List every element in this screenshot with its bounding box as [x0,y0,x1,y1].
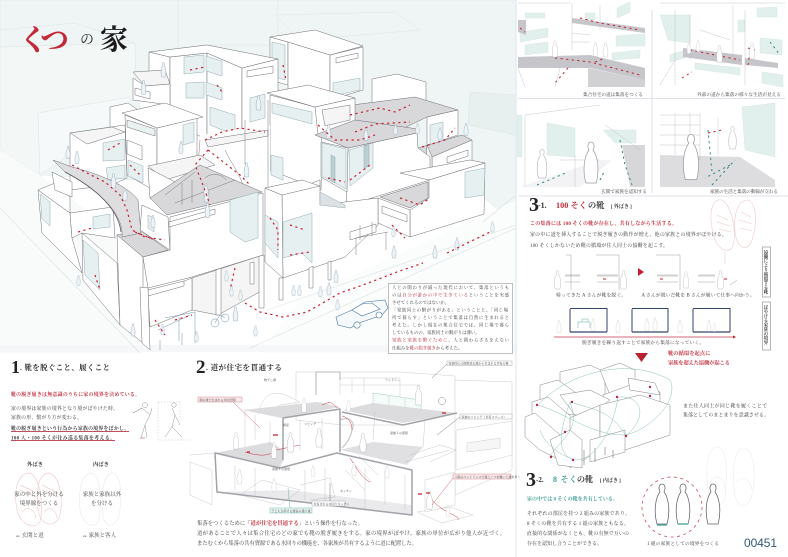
family circle with figures [642,477,720,547]
caption 3: 玄関で家族を認知する [601,188,647,195]
heading 3-2 [526,469,621,491]
axonometric community model [525,363,672,468]
caption 1: 集合住宅の道は集落をつくる [583,91,643,98]
inner slippers [80,460,122,525]
pale slippers [707,447,754,506]
callouts: 家族のリビング（共有スペース） [462,414,506,419]
section 3-2 [526,447,777,550]
curved bridge [53,160,141,237]
perspective 3 [517,105,645,187]
large shoe illustration [711,200,755,264]
section 2 text [197,519,505,547]
heading 3-1: [ 外ばき ] [611,203,632,210]
heading 3-1: 3 [529,194,539,216]
road lines [0,195,516,353]
perspective 2 [660,3,785,87]
text box: concept: 人との関わりが減った現代において、集落というも [392,284,509,291]
heading 3-2: -2. [536,476,544,484]
inner slippers: を分ける [91,499,113,507]
text box: concept: しているものの、家族同士の繋がりは薄い。 [392,329,480,336]
model description: 集落としてのまとまりを意識させる。 [683,412,769,418]
inner slippers: 内ばき [93,460,109,468]
room labels: 寝室 [283,422,289,427]
title: くつ [19,25,69,57]
outer shoes: 家の中と外を分ける [14,490,64,498]
family to community diagram: 脱ぎ履きを繰り返すことで家族から集落になっていく。 [582,339,704,346]
room labels: 物干し場 [264,377,276,382]
heading 1: . 靴を脱ぐこと、履くこと [20,363,110,372]
decks [243,402,340,418]
tower A [133,45,278,160]
heading 2: 2 [196,357,206,378]
block P with terrace Q [315,120,430,206]
large grey terrace [148,155,262,215]
room labels: 家族２の部屋 [390,430,408,435]
room labels: キッチン [340,488,352,493]
heading 3-2: 3 [526,469,536,491]
perspective images [517,2,788,196]
heading 3-1: の靴 [588,200,605,210]
text 3-2 [527,496,630,547]
text box: concept: 「家族同士の繋がりがある」ということと、「同じ場 [392,306,509,314]
center fill [198,100,270,192]
heading 2 [196,357,282,378]
text box: concept: させてくれるのではないか。 [392,299,449,306]
text box: concept: 所で暮らす」ということで集落は自然に生まれると [392,314,509,321]
examples: ex. 玄関と道 [16,531,44,539]
text box: concept: 仕組みを靴の脱ぎ履きから考えた。 [392,344,462,352]
vertical label: cooperation: 協働により循環する靴 [763,249,769,295]
red arrow and statement [635,349,730,366]
section 1 text: 100 人・100 そくが住み巡る集落を考える。 [11,434,115,442]
shoe exchange diagram: 帰ってきた A さんが靴を脱ぐ。 [556,292,626,298]
vertical label: cooperation [762,247,770,297]
table and bicycle at front [158,222,388,350]
perspective 1 [518,2,645,87]
inner slippers: 家族と家族以外 [83,490,122,498]
front block U [38,172,263,350]
section 2 [190,357,520,547]
people on building [66,63,494,342]
text box: concept: 考えた。しかし現在の集合住宅では、同じ場で暮ら [392,322,509,328]
car [336,300,388,328]
model description [683,402,769,418]
vertical column divider [515,0,517,557]
section drawing [190,361,520,523]
background: surrounding pale context buildings [0,0,516,353]
heading 3-1: 100 そく [556,201,587,210]
red footprint paths [72,65,490,335]
text 3-2: それぞれの部屋を持つ 2 組みの家族であり、 [527,510,630,517]
block S/T right lower [265,180,378,278]
outer shoes: 外ばき [27,460,43,468]
section 2 text: またむくから集落の共有資源である水回りの機能を、各家族が共有するように道に配置した。 [197,539,417,547]
thick section cuts [215,409,457,515]
heading 3-2: の靴 [577,474,593,484]
red arrow and statement: 靴の循環を起点に [668,349,710,357]
heading 3-2: [ 内ばき ] [600,477,621,484]
heading 3-2: 8 そく [553,475,577,484]
shoe exchange diagram [554,255,754,298]
perspective 4 [660,103,775,187]
section 1 text: 家族の形、繋がり方が変わる。 [11,414,82,421]
right cluster J K M [352,74,472,175]
caption 4: 家族の生活と集落の動線が交わる [710,188,778,195]
text 3-2: 存在を認知し合うことができる。 [527,540,602,547]
main axonometric building [38,30,485,350]
block R [378,160,485,237]
heading 3-1: -1. [538,201,547,210]
title: 家 [100,24,128,56]
tower G [267,85,355,190]
callouts: 共有される水回りキッチン [314,501,349,506]
text box: concept: のは自分が誰かの中で生きているということを実感 [392,292,510,298]
outer shoes [14,460,64,526]
section 1 text [11,391,140,442]
text 3-1: 家の中に道を挿入することで脱ぎ履きの動作が増え、他の家族との境界がぼやける。 [530,231,727,238]
heading 1: 1 [11,357,20,377]
room labels: 家族１の部屋 [272,466,290,471]
ground floor pillars [192,255,331,315]
text box: concept [388,284,512,354]
vertical label: blurred boundary: ぼやける家族の境界 [763,304,769,346]
room labels: ランドリー [385,377,400,382]
text 3-1: 100 そくしかないため靴の循環が住人同士の協働を起こす。 [530,242,668,249]
text 3-2: 直接的な関係がなくとも、靴の有無で互いの [527,530,629,537]
green bath unit [373,393,423,418]
callouts: １階のエントランスで違うくつを履いて道を歩く [454,474,520,479]
heading 3-1 [529,194,632,216]
section 3-1 [529,194,770,366]
callouts: 朝の道で生まれる共同空間 [200,397,236,402]
walking figures [133,402,190,440]
text box: concept: 家族と家族を繋ぐために、人と関わらざるをえない [392,336,509,344]
callouts [198,361,520,513]
section 2 text: 集落をつくるために「道が住宅を貫通する」という操作を行なった。 [197,519,363,527]
family circle with figures: 1 組の家族としての境界をつくる [647,540,719,547]
title [19,24,128,57]
section 1 text: 家の境界は家族の境界となり境がぼやけた時、 [11,405,118,412]
red routes [245,402,458,520]
section 2 text: 道があることで人々は集合住宅のどの家でも靴の脱ぎ履きをする。家の境界がぼやけ、家族の単位が広がり他人が近づく。 [197,529,505,537]
examples [16,531,117,539]
family to community diagram [554,308,736,346]
section 1 text: 靴の脱ぎ履きという行為から家族の境界をぼかし、 [11,425,129,432]
section 1 text: 靴の脱ぎ履きは無意識のうちに家の境界を決めている。 [11,391,140,398]
caption 2: 外部の道から集落の様々な生活が見える [697,91,781,98]
heading 2: . 道が住宅を貫通する [206,362,282,372]
callouts: 家族同士の関係性が道から生まれる共有の場 [448,361,509,366]
block D [70,103,203,192]
callouts: 子どもが歩ける寝室の通り道 [272,508,311,513]
model description: また住人同士が同じ靴を履くことで [683,402,767,410]
shoe exchange diagram: A さんが脱いだ靴を B さんが履いて仕事へ向かう。 [642,292,754,298]
room labels: リビング [304,421,316,426]
interior lines [235,412,456,510]
text 3-1: この集落には 100 そくの靴が存在し、共有しながら生活する。 [530,220,677,227]
examples: ex. 家族と客人 [83,531,117,539]
entry number: 00451 [744,536,777,550]
text 3-2: 家の中では 8 そくの靴を共有している。 [527,496,618,502]
text 3-1 [530,220,727,249]
red arrow and statement: 家族を超えた協働が起こる [668,358,730,366]
section 1 [11,357,190,539]
text 3-2: 8 そくの靴を共有する 1 組の家族ともなる。 [527,520,629,527]
outer shoes: 境界線をつくる [20,499,58,507]
vertical label: blurred boundary [762,302,770,350]
heading 1 [11,357,110,377]
room labels [264,377,408,493]
tower B far [270,30,363,100]
title: の [80,33,94,48]
people in section [233,385,450,516]
